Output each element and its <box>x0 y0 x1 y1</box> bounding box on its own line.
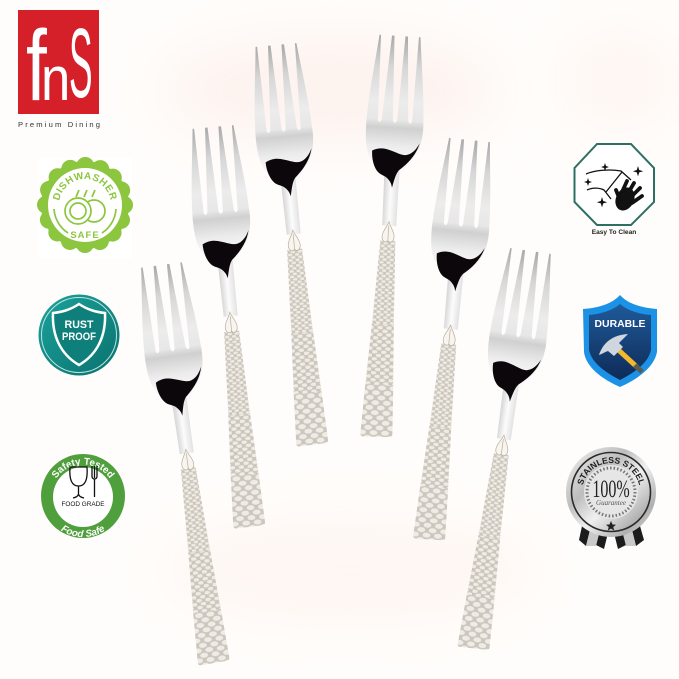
logo: FnS Premium Dining: Premium Dining <box>18 120 100 129</box>
badge: food safe: Food Safe <box>60 525 104 538</box>
badge: dishwasher safe: DISHWASHER <box>52 172 117 200</box>
badge: durable: DURABLE <box>594 318 646 330</box>
fork 4 <box>348 34 429 439</box>
logo: FnS Premium Dining: S <box>69 8 93 118</box>
badge: food safe: FOOD GRADE <box>62 501 104 508</box>
badge: stainless steel guarantee: 100% <box>592 474 630 503</box>
fork 1 <box>133 261 242 667</box>
badge: stainless steel guarantee: STAINLESS STEEL <box>578 457 644 486</box>
badge: rust proof: RUST <box>64 319 94 331</box>
fork 2 <box>185 124 278 530</box>
logo: FnS Premium Dining <box>18 8 100 129</box>
badge: dishwasher safe: SAFE <box>70 230 100 241</box>
fork 5 <box>400 137 498 543</box>
badge: easy to clean: Easy To Clean <box>592 229 636 236</box>
fork 6 <box>445 247 559 653</box>
badge: dishwasher safe <box>37 157 133 253</box>
badge: easy to clean <box>574 144 654 236</box>
badge: durable <box>583 295 657 387</box>
logo: FnS Premium Dining: f <box>26 9 47 121</box>
badge: stainless steel guarantee <box>566 447 656 549</box>
badge: rust proof: PROOF <box>62 331 96 343</box>
badge: food safe <box>41 454 125 538</box>
logo: FnS Premium Dining: n <box>41 45 70 114</box>
badge: food safe: Safety Tested <box>52 458 115 478</box>
badge: rust proof <box>38 294 120 376</box>
fork 3 <box>248 42 341 448</box>
badge: stainless steel guarantee: Guarantee <box>596 499 626 507</box>
